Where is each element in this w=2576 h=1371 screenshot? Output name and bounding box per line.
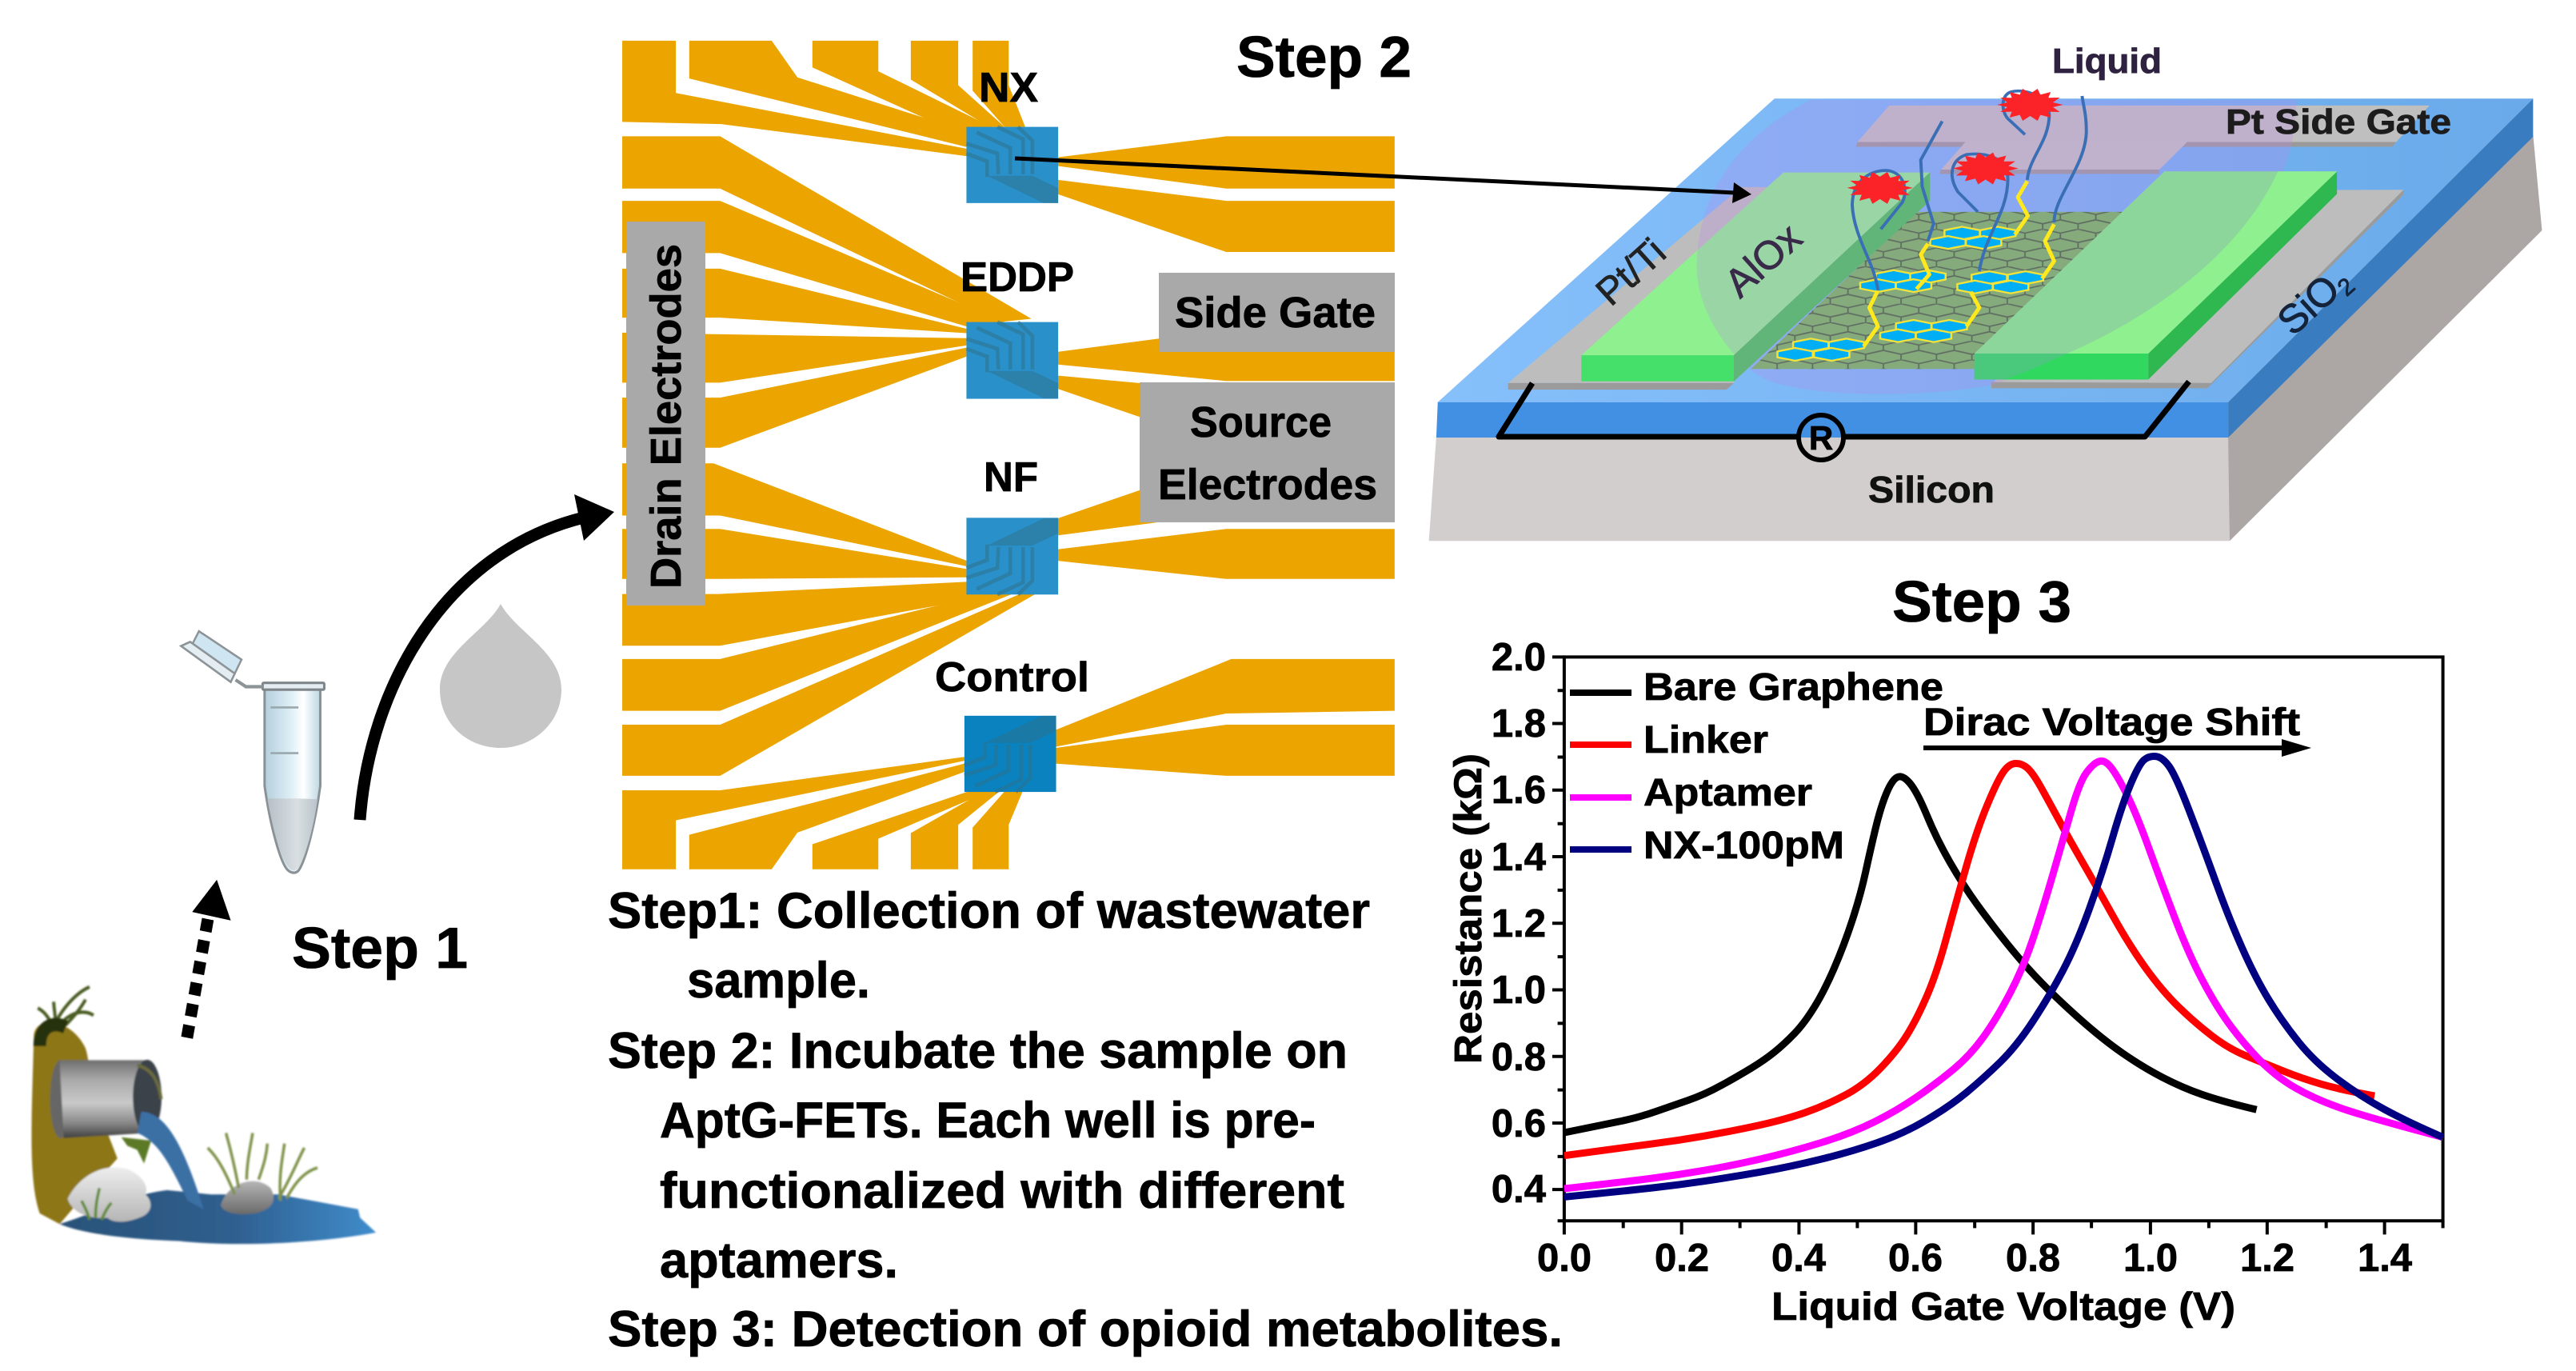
label: Control: Control	[935, 654, 1089, 701]
y axis labels: 2.0	[1492, 636, 1546, 679]
legend: Aptamer	[1643, 772, 1812, 814]
icon: moss below pipe	[122, 1137, 151, 1164]
resistance circuit: R	[1809, 419, 1833, 457]
x axis labels	[1537, 1237, 2412, 1280]
icon: water stream	[138, 1112, 204, 1209]
AlOx passivation blocks	[1581, 171, 2337, 382]
label: NX: NX	[979, 65, 1038, 111]
liquid dome	[1697, 100, 2296, 394]
plot frame and ticks	[1552, 657, 2443, 1234]
heading: Step 2: Step 2	[1236, 26, 1412, 90]
panel: wastewater collection scene	[31, 987, 376, 1244]
icon: pond grass	[82, 1133, 318, 1220]
x axis labels: 0.4	[1771, 1237, 1826, 1280]
x axis labels: 0.2	[1655, 1237, 1709, 1280]
icon: white rocks	[68, 1167, 150, 1221]
label box: Side Gate	[1159, 273, 1395, 352]
text block: step descriptions: Step1: Collection of wastewater	[608, 883, 1370, 939]
resistance circuit	[1499, 382, 2189, 460]
x axis title: Liquid Gate Voltage (V)	[1771, 1285, 2235, 1329]
curve: aptamer	[1564, 761, 2443, 1189]
heading: Step 1: Step 1	[292, 917, 468, 981]
text block: step descriptions: Step 2: Incubate the sample on	[608, 1023, 1348, 1079]
panel: electrode chip	[622, 41, 1395, 869]
text block: step descriptions: AptG-FETs. Each well is pre-	[660, 1093, 1316, 1149]
text block: step descriptions: aptamers.	[660, 1233, 898, 1289]
y axis labels: 1.8	[1492, 702, 1546, 745]
legend: Linker	[1643, 719, 1768, 761]
y axis labels: 1.6	[1492, 769, 1546, 812]
blue aptamer strands	[1852, 91, 2087, 290]
arrow: dashed arrow to tube	[187, 880, 231, 1037]
x axis labels: 1.0	[2123, 1237, 2178, 1280]
label box: Source Electrodes: Source	[1190, 398, 1332, 446]
x axis labels: 0.0	[1537, 1237, 1592, 1280]
arrow: chip to device pointer	[1015, 158, 1751, 203]
yellow linker chains	[1863, 182, 2054, 346]
y axis labels: 1.4	[1492, 836, 1546, 879]
opioid metabolite markers	[1847, 89, 2063, 204]
functionalized hexagon clusters	[1777, 226, 2043, 361]
graphene sheet	[1751, 212, 2122, 369]
well: NF	[966, 518, 1058, 594]
label: Silicon: Silicon	[1868, 469, 1995, 510]
text block: step descriptions: functionalized with different	[660, 1163, 1344, 1219]
icon: mossy mound	[31, 1022, 118, 1224]
label: SiO2: 2	[2333, 273, 2360, 302]
x axis labels: 1.2	[2240, 1237, 2294, 1280]
panel: graphene FET device	[1429, 42, 2542, 541]
icon: grass on top of mound	[38, 987, 94, 1046]
legend: NX-100pM	[1643, 825, 1844, 867]
label box: Drain Electrodes: Drain Electrodes	[642, 244, 690, 589]
arrow: curved arrow to chip	[360, 494, 614, 820]
label box: Side Gate: Side Gate	[1175, 289, 1376, 337]
heading: Step 3: Step 3	[1892, 570, 2071, 634]
icon: sample droplet	[440, 604, 561, 748]
x axis labels: 0.8	[2006, 1237, 2060, 1280]
y axis labels: 0.6	[1492, 1102, 1546, 1145]
text block: step descriptions: sample.	[687, 953, 870, 1009]
curve: linker	[1564, 763, 2374, 1156]
right AlOx block over graphene	[1734, 171, 2337, 382]
well: NX	[966, 127, 1058, 203]
y axis labels: 0.8	[1492, 1036, 1546, 1079]
label box: Source Electrodes: Electrodes	[1158, 461, 1377, 509]
annotation: Dirac voltage shift: Dirac Voltage Shift	[1923, 701, 2300, 744]
well: Control	[965, 716, 1056, 792]
curve: bare graphene	[1564, 777, 2257, 1133]
icon: grey rock	[221, 1181, 274, 1214]
y axis labels: 1.2	[1492, 902, 1546, 945]
chart: resistance vs liquid gate voltage	[1448, 636, 2443, 1329]
annotation: Dirac voltage shift	[1923, 701, 2311, 757]
label: AlOx: AlOx	[1716, 214, 1811, 306]
label: EDDP: EDDP	[961, 254, 1074, 301]
label: SiO2: SiO	[2269, 266, 2348, 344]
icon: pond	[60, 1190, 376, 1244]
x axis labels: 0.6	[1888, 1237, 1943, 1280]
text block: step descriptions	[608, 883, 1563, 1357]
y axis labels	[1492, 636, 1546, 1211]
text block: step descriptions: Step 3: Detection of opioid metabolites.	[608, 1301, 1563, 1357]
label: Pt/Ti: Pt/Ti	[1588, 230, 1674, 314]
label box: Drain Electrodes	[626, 222, 705, 606]
curve: NX-100pM	[1564, 756, 2443, 1197]
icon: drain pipe	[50, 1060, 162, 1138]
label: Liquid: Liquid	[2052, 42, 2162, 81]
device layers	[1429, 98, 2542, 541]
label: NF: NF	[984, 454, 1038, 501]
legend: Bare Graphene	[1643, 666, 1943, 709]
molecules on graphene	[1777, 89, 2087, 361]
y axis labels: 0.4	[1492, 1168, 1546, 1211]
label box: Source Electrodes	[1140, 382, 1395, 522]
label: Pt Side Gate: Pt Side Gate	[2226, 102, 2451, 142]
x axis labels: 1.4	[2358, 1237, 2412, 1280]
well: EDDP	[966, 322, 1058, 399]
y axis title: Resistance (kΩ)	[1448, 753, 1490, 1064]
legend	[1570, 666, 1943, 867]
y axis labels: 1.0	[1492, 969, 1546, 1012]
icon: sample tube	[181, 631, 324, 873]
chip traces	[622, 41, 1395, 869]
